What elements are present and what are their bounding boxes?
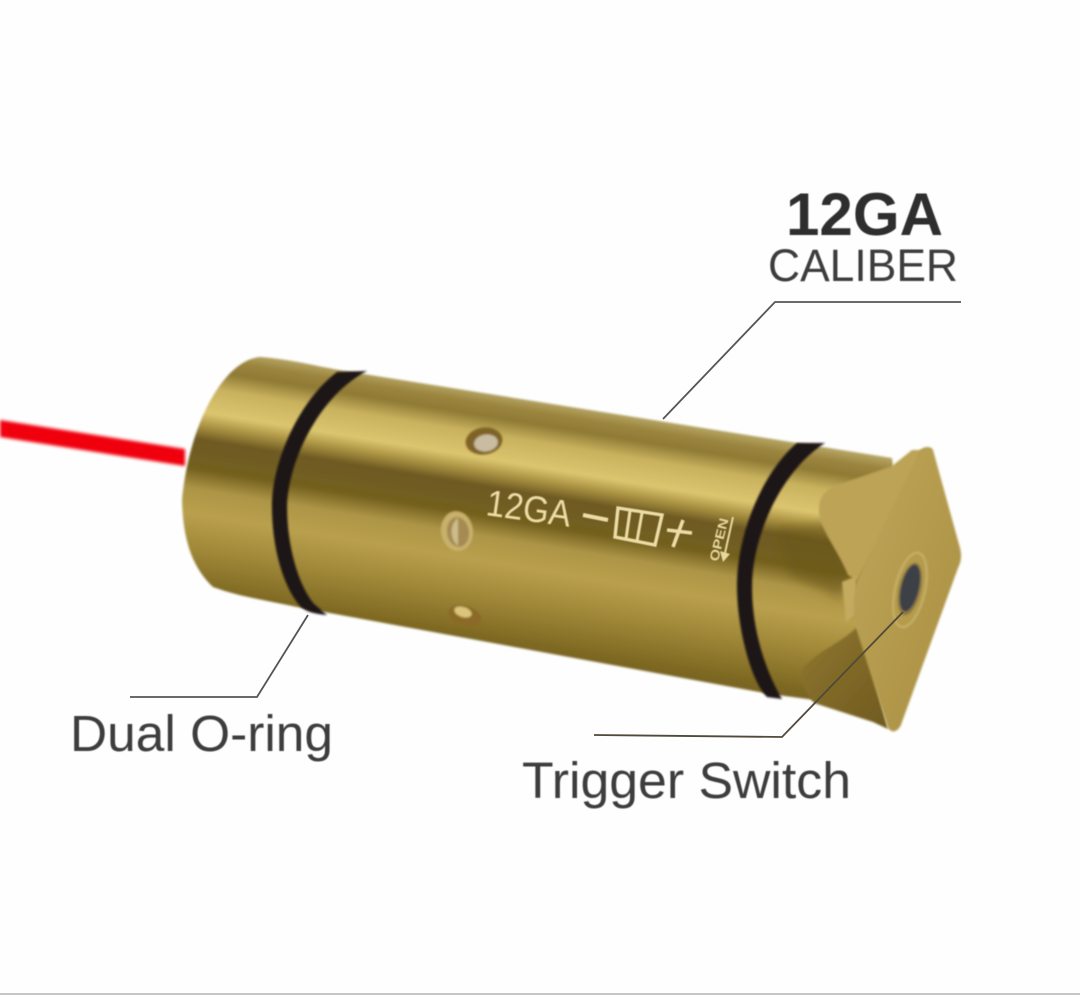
middle hole bbox=[438, 509, 476, 553]
front O-ring bbox=[272, 371, 367, 615]
neck between wings bbox=[842, 576, 858, 622]
brass cartridge bbox=[182, 357, 961, 731]
callout: 12GA caliber bbox=[663, 181, 961, 419]
label: Trigger Switch bbox=[522, 752, 851, 809]
shaded area near rear end bbox=[778, 522, 848, 600]
leader line bbox=[663, 302, 961, 419]
leader line bbox=[594, 612, 903, 737]
trigger switch button bbox=[887, 550, 933, 630]
cylinder body bbox=[182, 357, 905, 702]
trigger head face bbox=[854, 447, 961, 731]
callout: dual O-ring bbox=[70, 615, 333, 762]
callout subheading: CALIBER bbox=[768, 240, 958, 291]
callout: trigger switch bbox=[522, 612, 903, 809]
top hole bbox=[464, 425, 504, 457]
engraved marking 12GA: 12GA bbox=[484, 482, 574, 535]
callout heading: 12GA bbox=[786, 181, 943, 248]
rear O-ring bbox=[737, 443, 825, 699]
bottom edge strip bbox=[0, 993, 1080, 995]
label: Dual O-ring bbox=[70, 705, 333, 762]
laser beam bbox=[0, 420, 185, 466]
leader line bbox=[130, 615, 308, 697]
engraved adjustment scale bbox=[583, 508, 692, 547]
lower wing of trigger head bbox=[802, 628, 888, 729]
upper wing of trigger head bbox=[819, 450, 932, 581]
engraved OPEN arrow: OPEN bbox=[706, 516, 732, 563]
bottom screw hole bbox=[446, 601, 484, 631]
